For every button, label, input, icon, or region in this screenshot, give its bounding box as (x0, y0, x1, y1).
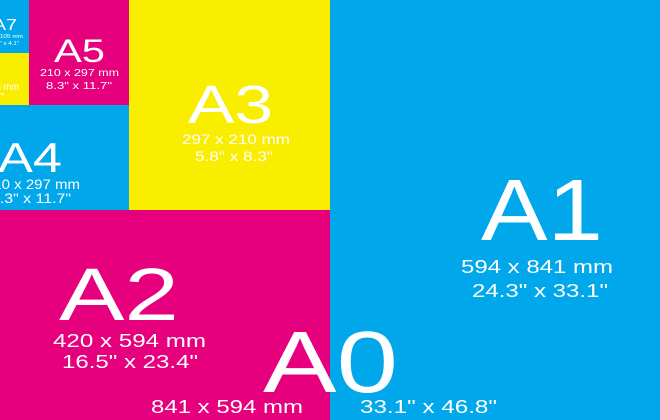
text: A5 millimetres: 210 x 297 mm (40, 68, 119, 79)
panel: A2 (0, 210, 330, 420)
panel: A1 (330, 0, 660, 420)
panel: A7 (0, 0, 29, 53)
text: A2 millimetres: 420 x 594 mm (53, 331, 206, 351)
text: A1 inches: 24.3" x 33.1" (472, 280, 608, 301)
panel: A5 (29, 0, 129, 105)
text: A1 millimetres: 594 x 841 mm (461, 256, 613, 277)
panel: A3 (129, 0, 330, 210)
panel: A4 (0, 105, 129, 210)
heading: A3: A3 (188, 75, 273, 135)
heading: A2: A2 (59, 253, 179, 336)
heading: A1: A1 (481, 162, 603, 259)
text: A2 inches: 16.5" x 23.4" (62, 352, 198, 372)
panel: A6 (0, 53, 29, 105)
heading: A5: A5 (54, 33, 105, 69)
heading: A0: A0 (263, 314, 398, 411)
text: A3 inches: 5.8" x 8.3" (195, 149, 273, 164)
text: A0 millimetres: 841 x 594 mm (151, 397, 303, 417)
text: A3 millimetres: 297 x 210 mm (182, 132, 290, 147)
text: A0 inches: 33.1" x 46.8" (360, 397, 497, 417)
text: A5 inches: 8.3" x 11.7" (46, 81, 113, 92)
